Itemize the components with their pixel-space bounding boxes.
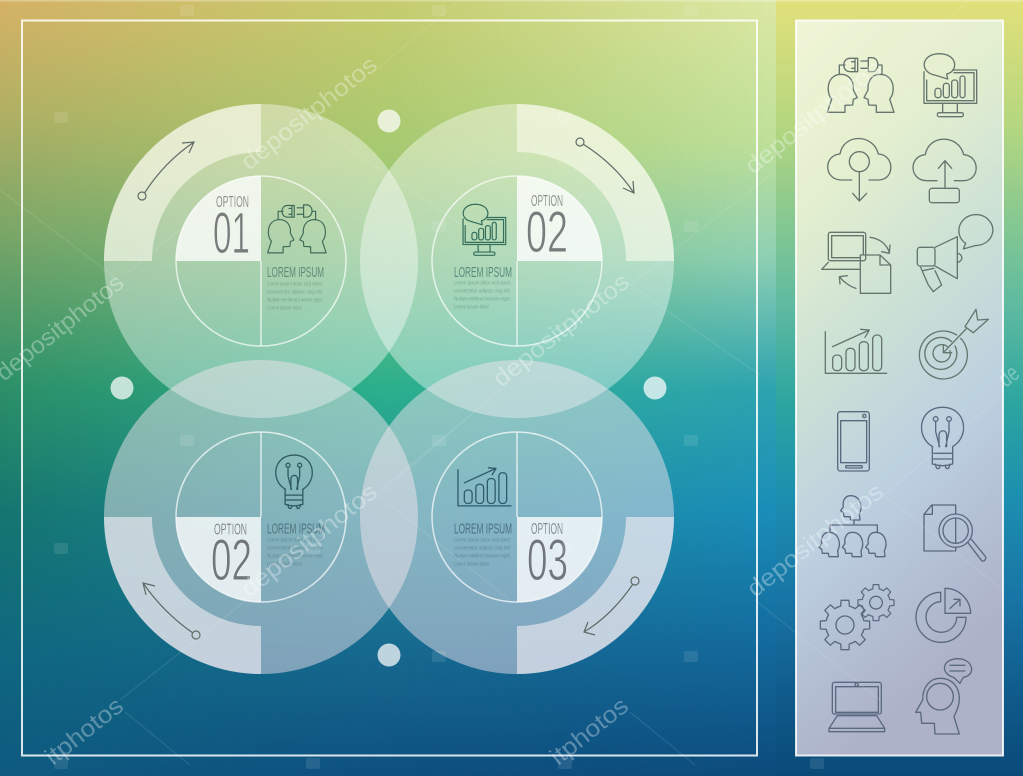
connector dots [110,110,666,666]
icon: cloud download [828,138,891,201]
text block: option 02 bottom [267,520,325,568]
icon: gears [820,585,894,650]
inner quadrant 3 [176,517,261,602]
icon: growth chart [825,329,887,373]
icon: two heads with plug [827,58,894,112]
circle 2: option 02 top [360,104,674,418]
panel: icon list [796,20,1003,756]
text block: option 02 bottom: Nullam eleifend lowcrie eget. [267,554,324,560]
arrow: option 02 top [576,138,634,193]
text block: option 02 bottom: Lorem ipsum dolor sicit amet, [267,538,324,544]
arrow: option 02 bottom [143,583,200,639]
watermark text: depositphotos [488,268,635,393]
text block: option 01 [267,264,324,312]
text block: option 02 top: consectetur adipisc cing elit. [454,288,511,294]
icon: document with magnifier [924,505,986,561]
text block: option 01: consectetur adipisc cing elit. [267,290,323,296]
text block: option 03: Nullam eleifend lowcrie eget. [454,554,511,560]
label: option 03 [527,521,568,593]
icon: monitor with chat, option 02 [463,204,506,255]
icon: monitor with chat [924,54,977,117]
inner quadrant 2 [517,176,602,261]
watermark text: depositphotos [740,55,887,180]
circle 4: option 03 [360,360,674,674]
icon: laptop and document [822,232,891,293]
icon: two heads with plug, option 01 [268,205,326,253]
ring quadrant 2 [517,104,674,261]
text block: option 03: consectetur adipisc cing elit. [454,546,511,552]
label: option 02 top: 02 [526,200,568,265]
icon: light bulb, option 02 [276,455,312,508]
arrow: option 03 [584,577,639,635]
watermark text: itphotos [545,692,634,771]
text block: option 02 top: LOREM IPSUM [454,264,512,281]
label: option 01: 01 [213,201,250,266]
icons lower half [819,407,986,734]
watermark text: depositphotos [742,478,889,603]
text block: option 01: Nullam eleifend lowcrie eget. [267,298,323,304]
icon: megaphone [917,215,993,292]
inner quadrant 4 [517,517,602,602]
watermark camera marks [54,5,824,769]
label: option 02 top: OPTION [531,193,563,210]
text block: option 02 top [454,264,512,310]
text block: option 02 bottom: LOREM IPSUM [267,520,325,538]
text block: option 03: LOREM IPSUM [454,520,512,538]
watermark text: itphotos [40,692,129,771]
label: option 02 bottom: 02 [211,528,252,593]
text block: option 02 bottom: consectetur adipisc cing elit. [267,546,324,552]
text block: option 01: Lorem ipsum dolor [267,306,302,312]
text block: option 03: Lorem ipsum dolor sicit amet, [454,538,511,544]
text block: option 01: Lorem ipsum dolor sicit amet, [267,282,323,288]
icon: head with thought bubble [916,659,972,734]
ring quadrant 1 [104,104,261,261]
label: option 03: OPTION [531,521,563,538]
inner circle outlines [176,176,602,602]
icon: growth chart, option 03 [458,468,511,506]
label: option 02 bottom [211,522,252,593]
ring quadrant 3 [104,517,261,674]
inner quadrant 1 [176,176,261,261]
text block: option 02 top: Lorem ipsum dolor sicit amet, [454,280,511,286]
arrow: option 01 [138,142,194,200]
icon: pie chart [916,588,971,642]
icon: org chart heads [819,496,886,557]
outer frame [22,20,757,756]
icon: cloud upload [913,139,976,203]
text block: option 02 top: Nullam eleifend lowcrie eget. [454,296,511,302]
circle 3: option 02 bottom [104,360,418,674]
label: option 02 top [526,193,568,265]
icon: smartphone [838,412,869,471]
label: option 01 [213,194,250,266]
text block: option 03: Lorem ipsum dolor [454,562,489,568]
label: option 03: 03 [527,528,568,593]
ring quadrant 4 [517,517,674,674]
icons upper half [822,54,993,379]
watermark text: depositphotos [236,478,383,603]
icon: light bulb [922,407,964,469]
circle 1: option 01 [104,104,418,418]
label: option 02 bottom: OPTION [214,522,247,538]
icon: laptop [829,682,885,732]
label: option 01: OPTION [216,194,249,211]
text block: option 02 bottom: Lorem ipsum dolor [267,562,302,568]
icon: target with arrow [919,309,988,379]
text block: option 03 [454,520,512,568]
watermark text: depositphotos [236,51,383,176]
text block: option 01: LOREM IPSUM [267,264,324,281]
text block: option 02 top: Lorem ipsum dolor [454,304,489,310]
